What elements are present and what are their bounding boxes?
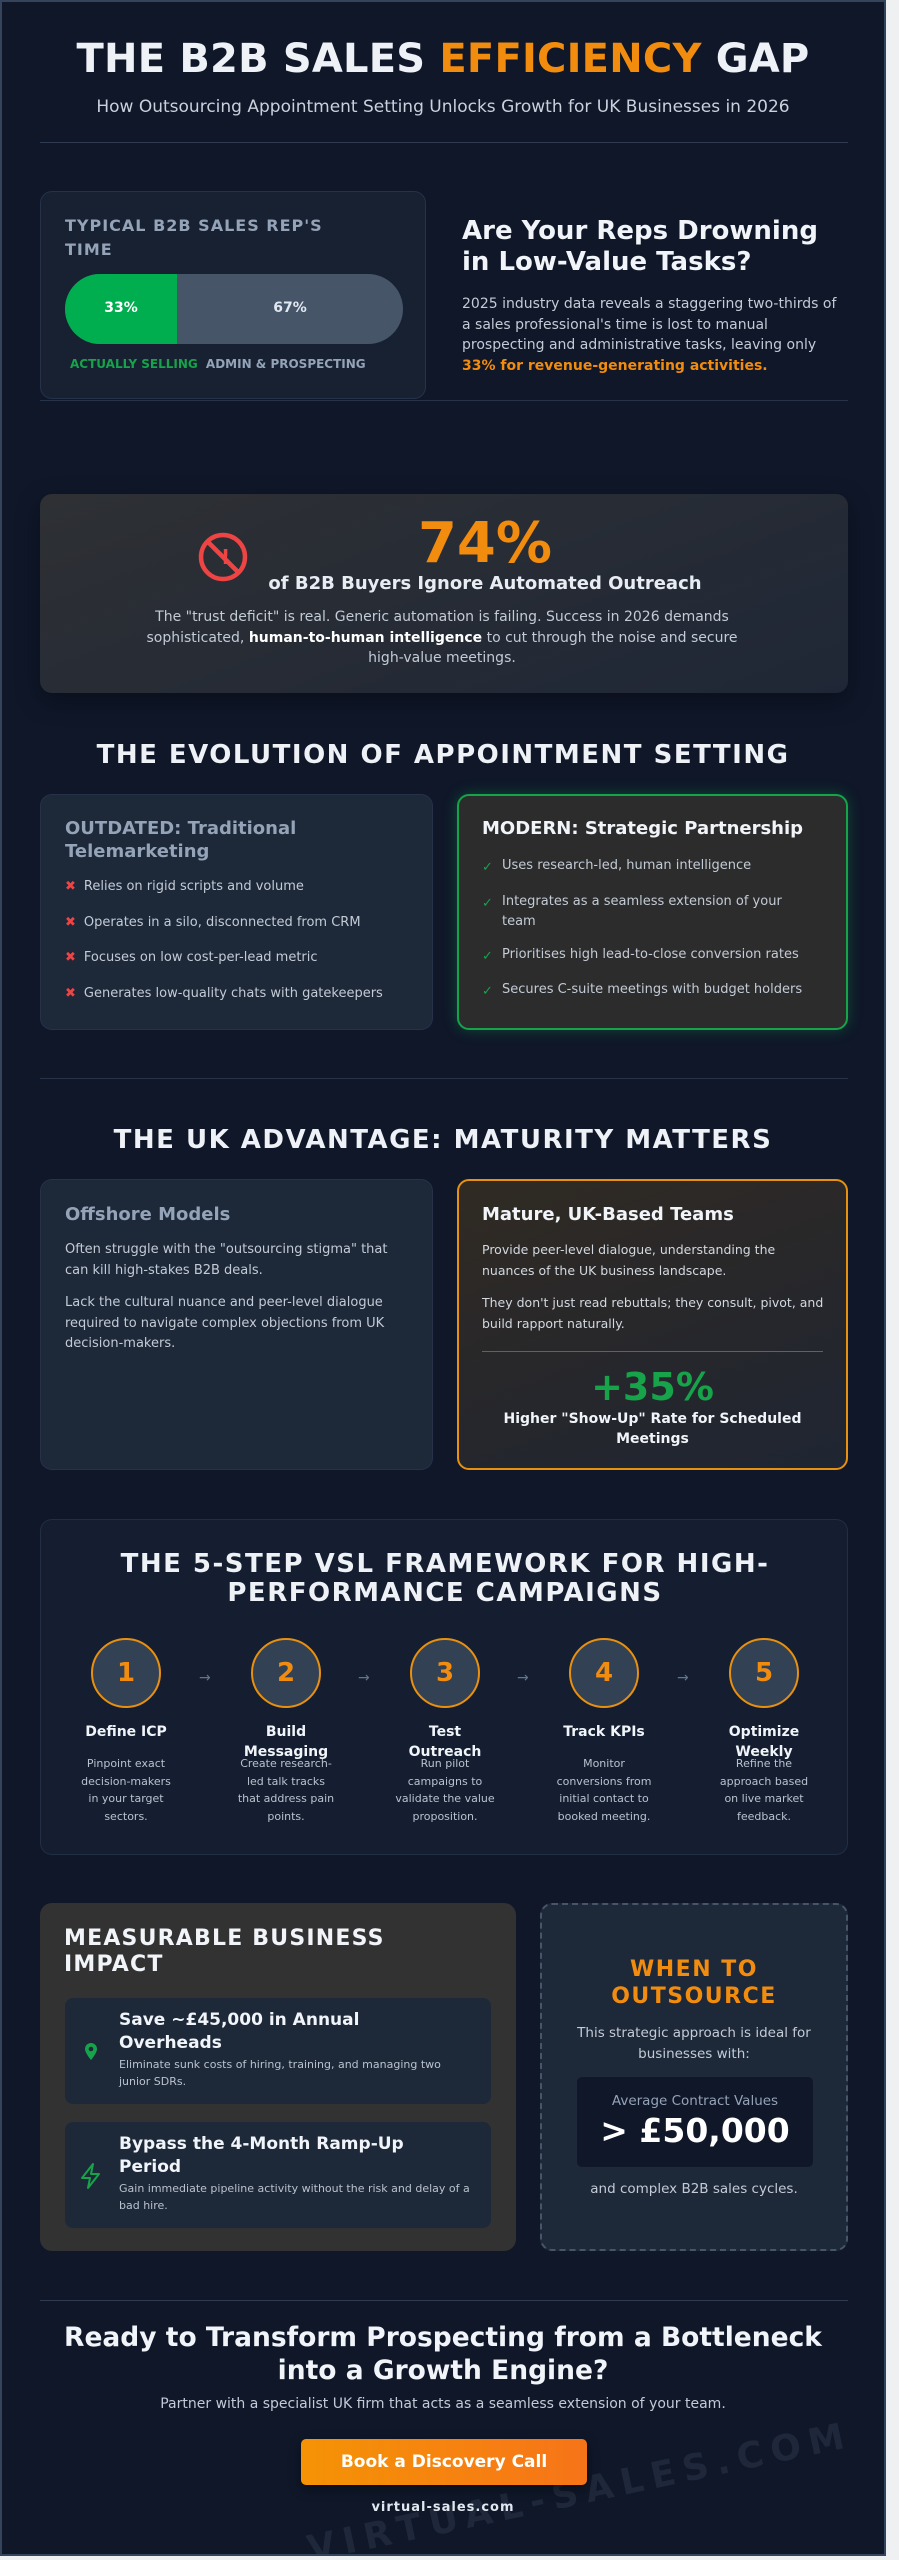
modern title: MODERN: Strategic Partnership — [482, 818, 803, 839]
panel: 5-step framework — [40, 1519, 848, 1855]
CTA button: Book a Discovery Call — [341, 2452, 547, 2472]
icon: money pin — [85, 2043, 97, 2060]
outdated list: ✖ Operates in a silo, disconnected from CRM — [65, 914, 361, 930]
contract value box: Average Contract Values — [612, 2093, 778, 2109]
stat +35%: Higher "Show-Up" Rate for Scheduled — [504, 1411, 801, 1427]
step 3: 3 — [436, 1658, 454, 1688]
when heading: OUTSOURCE — [611, 1984, 777, 2009]
panel heading: TYPICAL B2B SALES REP'S TIME — [65, 216, 323, 259]
text block: drowning: Are Your Reps Drowning in Low-Value Tasks? — [462, 216, 818, 277]
modern list: ✓ — [482, 949, 493, 964]
impact item: savings: Save ~£45,000 in Annual Overheads — [119, 2010, 359, 2053]
modern list: Uses research-led, human intelligence — [502, 858, 751, 873]
step 2: Create research-led talk tracks that address pain points. — [238, 1757, 334, 1823]
stat +35%: +35% — [591, 1365, 714, 1409]
step 5 — [720, 1638, 808, 1823]
step 1: 1 — [117, 1658, 135, 1688]
modern list: ✓ — [482, 896, 493, 911]
step 5: Optimize Weekly — [729, 1724, 799, 1760]
panel: sales rep time — [40, 191, 426, 399]
bar chart — [65, 274, 403, 344]
modern list: Prioritises high lead-to-close conversion rates — [502, 947, 799, 962]
subtitle: How Outsourcing Appointment Setting Unlocks Growth for UK Businesses in 2026 — [96, 97, 790, 117]
impact item: savings: Eliminate sunk costs of hiring, training, and managing two junior SDRs. — [119, 2058, 441, 2088]
modern list: Integrates as a seamless extension of your team — [502, 894, 782, 929]
contract value box: > £50,000 — [600, 2111, 790, 2150]
framework heading: THE 5-STEP VSL FRAMEWORK FOR HIGH- — [121, 1549, 769, 1579]
panel: 74% stat — [40, 494, 848, 693]
arrow: → — [677, 1670, 689, 1686]
UK text: Provide peer-level dialogue, understanding the nuances of the UK business landscape. — [482, 1242, 775, 1278]
outdated title: OUTDATED: Traditional Telemarketing — [65, 818, 296, 862]
footer url: virtual-sales.com — [371, 2500, 515, 2515]
arrow: → — [199, 1670, 211, 1686]
CTA heading — [64, 2322, 822, 2386]
stat text: The "trust deficit" is real. Generic automation is failing. Success in 2026 demands sophisticated, human-to-human intelligence to cut through the noise and secure high-value meetings. — [146, 609, 738, 666]
title: THE B2B SALES EFFICIENCY GAP — [77, 36, 809, 82]
step 3 — [395, 1638, 495, 1823]
offshore text: Often struggle with the "outsourcing stigma" that can kill high-stakes B2B deals. — [65, 1242, 387, 1278]
text block: drowning: 2025 industry data reveals a staggering two-thirds of a sales professional's time is lost to manual prospecting and administrative tasks, leaving only 33% for revenue-generating activities. — [462, 296, 836, 374]
outdated list: ✖ Focuses on low cost-per-lead metric — [65, 950, 318, 965]
contract value box — [576, 2076, 814, 2168]
icon: no-bell: ! — [221, 545, 230, 569]
step 4: 4 — [595, 1658, 613, 1688]
bar labels: ACTUALLY SELLING ADMIN & PROSPECTING — [70, 357, 366, 371]
panel: outdated — [40, 794, 433, 1030]
stat +35%: Meetings — [616, 1431, 689, 1447]
panel: measurable impact — [40, 1903, 516, 2251]
arrow: → — [517, 1670, 529, 1686]
step 2: Build Messaging — [244, 1724, 328, 1760]
step 5: 5 — [755, 1658, 773, 1688]
icon: lightning — [81, 2163, 100, 2189]
offshore text: Lack the cultural nuance and peer-level dialogue required to navigate complex objections from UK decision-makers. — [65, 1295, 384, 1351]
when heading — [611, 1957, 777, 2009]
CTA text: Partner with a specialist UK firm that acts as a seamless extension of your team. — [160, 2396, 726, 2412]
step 4: Track KPIs — [563, 1724, 645, 1740]
offshore text — [65, 1242, 388, 1351]
bar chart: 67% — [273, 300, 307, 316]
impact heading: MEASURABLE BUSINESS IMPACT — [64, 1926, 385, 1977]
impact item: savings — [65, 1998, 491, 2104]
outdated list: ✖ Relies on rigid scripts and volume — [65, 879, 304, 894]
step 5: Refine the approach based on live market feedback. — [720, 1757, 808, 1823]
step 3: Run pilot campaigns to validate the value proposition. — [395, 1757, 495, 1823]
text block: drowning — [462, 216, 837, 374]
offshore title: Offshore Models — [65, 1204, 230, 1225]
step 1: Pinpoint exact decision-makers in your target sectors. — [81, 1757, 171, 1823]
step 2: 2 — [277, 1658, 295, 1688]
CTA heading: into a Growth Engine? — [278, 2355, 608, 2386]
heading: UK advantage: THE UK ADVANTAGE: MATURITY MATTERS — [114, 1125, 772, 1155]
bar chart: 33% — [104, 300, 138, 316]
UK text — [482, 1242, 823, 1330]
big stat: 74% — [418, 511, 552, 576]
impact item: ramp-up: Bypass the 4-Month Ramp-Up Period — [119, 2134, 404, 2177]
when heading: WHEN TO — [630, 1957, 758, 1982]
UK title: Mature, UK-Based Teams — [482, 1204, 734, 1225]
UK text: They don't just read rebuttals; they consult, pivot, and build rapport naturally. — [482, 1295, 823, 1330]
step 4 — [557, 1638, 651, 1823]
modern list — [482, 858, 802, 999]
impact item: ramp-up — [65, 2122, 491, 2228]
panel: UK teams — [457, 1179, 848, 1470]
step 1: Define ICP — [85, 1724, 167, 1740]
panel: modern — [457, 794, 848, 1030]
step 4: Monitor conversions from initial contact to booked meeting. — [557, 1757, 651, 1823]
stat caption: of B2B Buyers Ignore Automated Outreach — [268, 573, 702, 594]
arrow: → — [358, 1670, 370, 1686]
when footer text: and complex B2B sales cycles. — [590, 2181, 798, 2197]
modern list: Secures C-suite meetings with budget holders — [502, 982, 802, 997]
framework heading — [120, 1549, 769, 1608]
step 1 — [81, 1638, 171, 1823]
modern list: ✓ — [482, 984, 493, 999]
impact item: ramp-up: Gain immediate pipeline activity without the risk and delay of a bad hire. — [119, 2182, 470, 2212]
CTA heading: Ready to Transform Prospecting from a Bottleneck — [64, 2322, 822, 2353]
modern list: ✓ — [482, 860, 493, 875]
step 3: Test Outreach — [409, 1724, 481, 1760]
stat +35% — [504, 1365, 801, 1447]
icon: no-bell — [198, 532, 248, 582]
step 2 — [238, 1638, 334, 1823]
outdated list — [65, 879, 383, 1000]
CTA button — [301, 2439, 587, 2485]
heading: evolution: THE EVOLUTION OF APPOINTMENT SETTING — [97, 740, 789, 770]
panel: offshore — [40, 1179, 433, 1470]
outdated list: ✖ Generates low-quality chats with gatekeepers — [65, 986, 383, 1000]
panel: when to outsource — [540, 1903, 848, 2251]
when text: This strategic approach is ideal for businesses with: — [577, 2025, 811, 2062]
framework heading: PERFORMANCE CAMPAIGNS — [227, 1578, 663, 1608]
